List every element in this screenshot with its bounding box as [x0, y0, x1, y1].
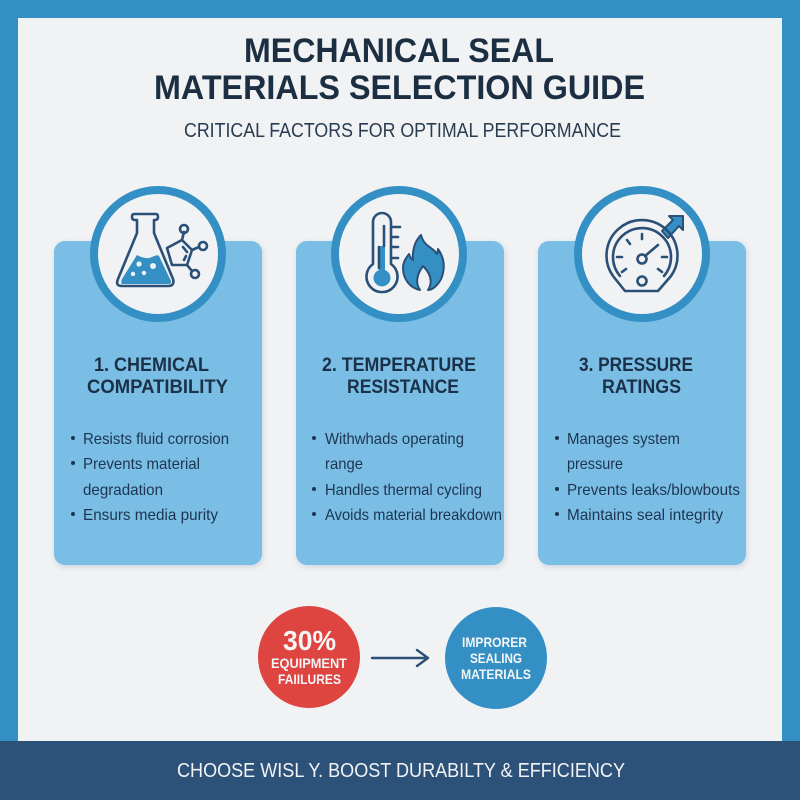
callout: improper sealing materials: SEALING [470, 650, 522, 666]
icon: thermometer and flame [335, 190, 463, 318]
bullet list [312, 431, 502, 524]
footer banner: CHOOSE WISL Y. BOOST DURABILTY & EFFICIENCY [177, 760, 625, 782]
bullet list: pressure [567, 456, 623, 473]
callout: 30% equipment failures: EQUIPMENT [271, 655, 347, 671]
icon: flask and molecule [94, 190, 222, 318]
panel: temperature resistance [296, 190, 504, 565]
callout: improper sealing materials: MATERIALS [461, 666, 531, 682]
bullet list: Maintains seal integrity [567, 507, 723, 524]
bullet list: Avoids material breakdown [325, 507, 502, 524]
heading [322, 355, 476, 398]
bullet list: Withwhads operating [325, 431, 464, 448]
panel: chemical compatibility [54, 190, 262, 565]
title [154, 32, 645, 107]
subtitle: CRITICAL FACTORS FOR OPTIMAL PERFORMANCE [184, 120, 621, 142]
arrow [372, 650, 428, 666]
bullet list: Resists fluid corrosion [83, 431, 229, 448]
title: MATERIALS SELECTION GUIDE [154, 69, 645, 107]
callout: 30% equipment failures: 30% [283, 625, 336, 656]
callout: improper sealing materials [445, 607, 547, 709]
heading: 2. TEMPERATURE [322, 355, 476, 376]
footer banner [0, 741, 800, 800]
heading: 3. PRESSURE [579, 355, 693, 376]
bullet list: Ensurs media purity [83, 507, 218, 524]
heading: COMPATIBILITY [87, 377, 228, 398]
bullet list [555, 431, 740, 524]
bullet list [71, 431, 229, 524]
title: MECHANICAL SEAL [244, 32, 554, 70]
icon: pressure gauge [578, 190, 706, 318]
bullet list: Prevents leaks/blowbouts [567, 482, 740, 499]
heading: RATINGS [602, 377, 681, 398]
heading: 1. CHEMICAL [94, 355, 209, 376]
bullet list: range [325, 456, 363, 473]
callout: 30% equipment failures [258, 606, 360, 708]
callout: improper sealing materials: IMPRORER [462, 634, 527, 650]
callout: 30% equipment failures: FAIILURES [278, 671, 341, 687]
heading [87, 355, 228, 398]
bullet list: Manages system [567, 431, 680, 448]
bullet list: Handles thermal cycling [325, 482, 482, 499]
bullet list: degradation [83, 482, 163, 499]
heading [579, 355, 693, 398]
heading: RESISTANCE [347, 377, 459, 398]
bullet list: Prevents material [83, 456, 200, 473]
panel: pressure ratings [538, 190, 746, 565]
